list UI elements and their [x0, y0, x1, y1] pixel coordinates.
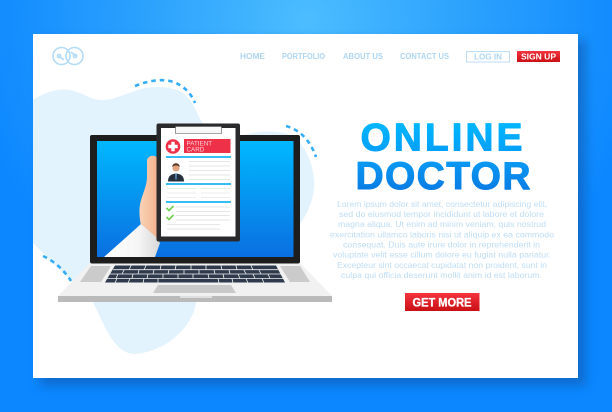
blue divider bottom — [166, 201, 231, 203]
lorem ipsum paragraph: voluptate velit esse cillum dolore eu fugiat nulla pariatur. — [333, 250, 551, 260]
keyboard — [105, 266, 285, 282]
title line two: DOCTOR — [356, 155, 530, 198]
logo — [53, 48, 83, 64]
lorem ipsum paragraph — [330, 199, 554, 280]
medical cross icon — [166, 139, 180, 154]
lorem ipsum paragraph: culpa qui officia deserunt mollit anim id est laborum. — [341, 270, 542, 280]
right speaker — [280, 266, 310, 282]
log in button — [466, 52, 510, 62]
clipboard board — [156, 124, 240, 242]
lorem ipsum paragraph: sed do eiusmod tempor incididunt ut labore et dolore — [339, 209, 544, 219]
patient card label: PATIENT — [186, 140, 212, 148]
nav: portfolio: PORTFOLIO — [282, 52, 325, 61]
title line one: ONLINE — [360, 116, 522, 160]
hand — [139, 156, 160, 240]
white page card — [33, 34, 578, 378]
blue divider top — [166, 156, 231, 158]
decorative dashed arc left — [43, 256, 71, 281]
green checkmark one — [166, 206, 174, 210]
laptop — [58, 135, 332, 302]
decorative dashed arc right — [286, 126, 316, 157]
lorem ipsum paragraph: Lorem ipsum dolor sit amet, consectetur adipiscing elit, — [337, 199, 547, 209]
laptop notch — [180, 296, 212, 298]
nav: about us: ABOUT US — [343, 52, 383, 61]
doctor portrait — [168, 163, 184, 182]
card shadow — [40, 40, 586, 386]
get more button: GET MORE — [412, 298, 472, 310]
trackpad — [153, 285, 236, 293]
blue divider middle — [166, 183, 231, 185]
sleeve — [104, 224, 160, 257]
navigation — [240, 51, 560, 62]
laptop front edge — [58, 296, 332, 302]
keyboard key gaps — [107, 266, 284, 283]
green checkmark two — [166, 215, 174, 220]
left speaker — [80, 266, 111, 282]
patient card label: CARD — [186, 147, 205, 154]
lorem ipsum paragraph: consequat. Duis aute irure dolor in reprehenderit in — [343, 240, 540, 250]
laptop display — [97, 141, 294, 257]
clipboard — [156, 124, 240, 242]
clipboard clip — [176, 126, 222, 134]
title — [356, 116, 530, 198]
checklist lines — [167, 207, 230, 229]
nav: contact us: CONTACT US — [400, 52, 449, 61]
laptop screen bezel — [90, 135, 300, 264]
lorem ipsum paragraph: Excepteur sint occaecat cupidatat non proident, sunt in — [337, 260, 547, 270]
laptop base deck — [58, 263, 332, 296]
patient detail lines — [189, 162, 230, 180]
decorative dashed arc top — [135, 80, 195, 103]
clipboard paper — [161, 128, 236, 236]
background blob — [33, 87, 314, 354]
sign up button — [517, 51, 560, 62]
lorem ipsum paragraph: exercitation ullamco laboris nisi ut aliquip ex ea commodo — [330, 229, 554, 239]
hand holding clipboard — [104, 156, 160, 257]
form lines — [167, 188, 230, 198]
nav: home: HOME — [240, 52, 265, 61]
patient card label — [184, 139, 230, 154]
lorem ipsum paragraph: magna aliqua. Ut enim ad minim veniam, quis nostrud — [338, 219, 546, 229]
log in button: LOG IN — [474, 52, 502, 62]
get more button — [405, 293, 480, 311]
sign up button: SIGN UP — [521, 52, 556, 62]
